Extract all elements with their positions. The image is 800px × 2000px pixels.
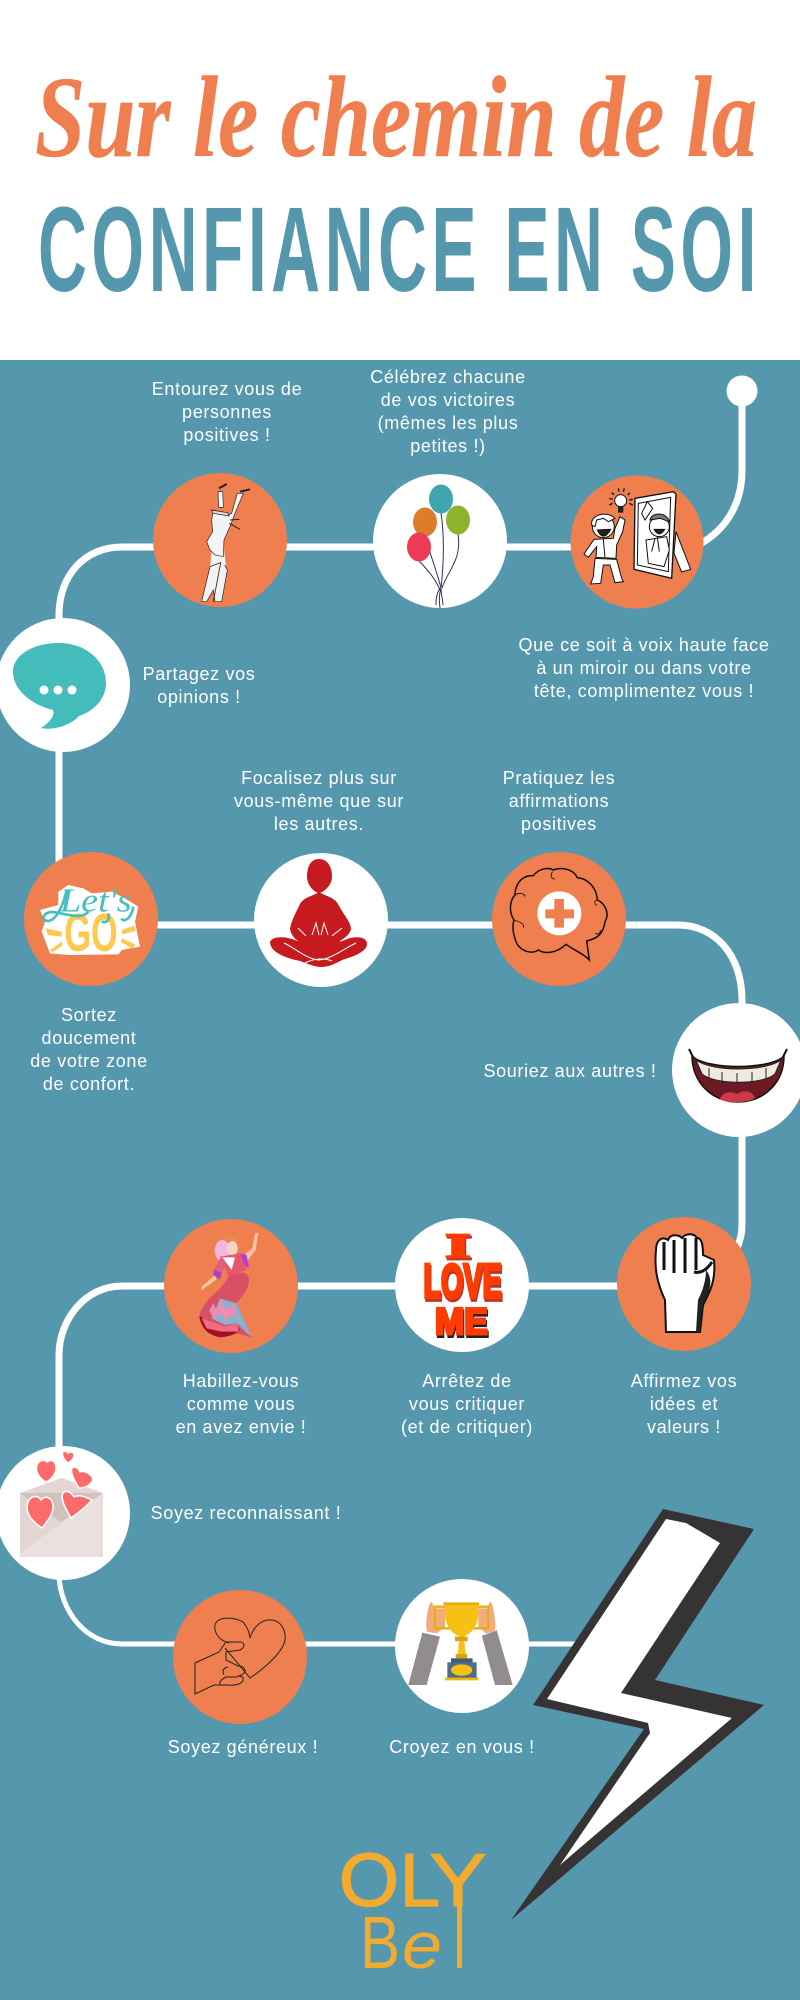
icon: laughing mouth in white circle: [672, 1003, 800, 1137]
text: focalisez: Focalisez plus sur: [241, 768, 397, 788]
text: miroir: Que ce soit à voix haute face: [518, 635, 770, 655]
text: généreux: Soyez généreux !: [168, 1737, 318, 1757]
logo: oly be: O: [339, 1838, 399, 1922]
icon: envelope with hearts in white circle: [0, 1446, 130, 1580]
title: condensed line: CONFIANCE EN SOI: [38, 181, 761, 317]
icon: let's go sticker in orange circle: GO: [64, 904, 118, 963]
path: start dot and winding route: [59, 376, 758, 1644]
text: célébrez: (mêmes les plus: [378, 413, 518, 433]
text: habillez: en avez envie !: [176, 1417, 306, 1437]
icon: i love me lettering in white circle: ME: [436, 1304, 489, 1345]
logo: oly be: L: [400, 1838, 440, 1922]
text: affirmez: idées et: [650, 1394, 718, 1414]
text: célébrez: petites !): [410, 436, 486, 456]
icon: hand holding heart in orange circle: [173, 1590, 307, 1724]
icon: let's go sticker in orange circle: [24, 852, 158, 986]
icon: let's go sticker in orange circle: Let's: [59, 883, 132, 920]
icon: balloons in white circle: [373, 474, 507, 608]
text: sortez: Sortez: [61, 1005, 117, 1025]
text: arrêtez: vous critiquer: [409, 1394, 525, 1414]
text: pratiquez: positives: [521, 814, 597, 834]
icon: man complimenting himself in mirror: [570, 476, 704, 608]
text: sortez: de votre zone: [30, 1051, 148, 1071]
icon: meditating figure in white circle: [254, 853, 388, 987]
text: arrêtez: Arrêtez de: [422, 1371, 512, 1391]
text: entourez vous: personnes: [182, 402, 272, 422]
text: pratiquez: Pratiquez les: [503, 768, 615, 788]
logo: oly be: B: [360, 1901, 400, 1984]
text: entourez vous: Entourez vous de: [152, 379, 302, 399]
text: croyez: Croyez en vous !: [389, 1737, 535, 1757]
text: miroir: à un miroir ou dans votre: [536, 658, 752, 678]
text: habillez: Habillez-vous: [183, 1371, 299, 1391]
text: habillez: comme vous: [187, 1394, 295, 1414]
icon: trophy in white circle: [395, 1579, 529, 1713]
text: arrêtez: (et de critiquer): [401, 1417, 533, 1437]
icon: i love me lettering in white circle: I: [445, 1226, 471, 1265]
icon: lightning bolt: [511, 1509, 764, 1920]
icon: dancing woman in orange circle: [153, 473, 287, 607]
text: miroir: tête, complimentez vous !: [534, 681, 754, 701]
logo: oly be: Y: [429, 1838, 487, 1922]
text: entourez vous: positives !: [183, 425, 271, 445]
icon: i love me lettering in white circle: LOVE: [424, 1257, 503, 1311]
text: pratiquez: affirmations: [509, 791, 609, 811]
icon: woman in dress in orange circle: [164, 1219, 298, 1353]
text: partagez: opinions !: [157, 687, 241, 707]
icon: raised fist in orange circle: [617, 1217, 751, 1351]
text: sortez: doucement: [42, 1028, 136, 1048]
text: affirmez: Affirmez vos: [631, 1371, 737, 1391]
title header panel: [0, 0, 800, 360]
text: affirmez: valeurs !: [647, 1417, 721, 1437]
logo: oly be: [339, 1838, 487, 1984]
icon: speech bubble in white circle: [0, 618, 130, 752]
text: focalisez: vous-même que sur: [234, 791, 404, 811]
text: partagez: Partagez vos: [143, 664, 255, 684]
icon: i love me lettering in white circle: I: [446, 1228, 473, 1267]
icon: i love me lettering in white circle: LOVE: [423, 1254, 502, 1308]
text: reconnaissant: Soyez reconnaissant !: [151, 1503, 341, 1523]
text: sortez: de confort.: [43, 1074, 135, 1094]
icon: i love me lettering in white circle: [395, 1218, 529, 1352]
logo: oly be: e: [402, 1908, 442, 1982]
icon: positive thought brain bubble in orange circle: [492, 852, 626, 986]
text: célébrez: Célébrez chacune: [370, 367, 526, 387]
text: focalisez: les autres.: [274, 814, 364, 834]
text: célébrez: de vos victoires: [381, 390, 515, 410]
text: souriez: Souriez aux autres !: [483, 1061, 657, 1081]
icon: i love me lettering in white circle: ME: [435, 1301, 488, 1342]
